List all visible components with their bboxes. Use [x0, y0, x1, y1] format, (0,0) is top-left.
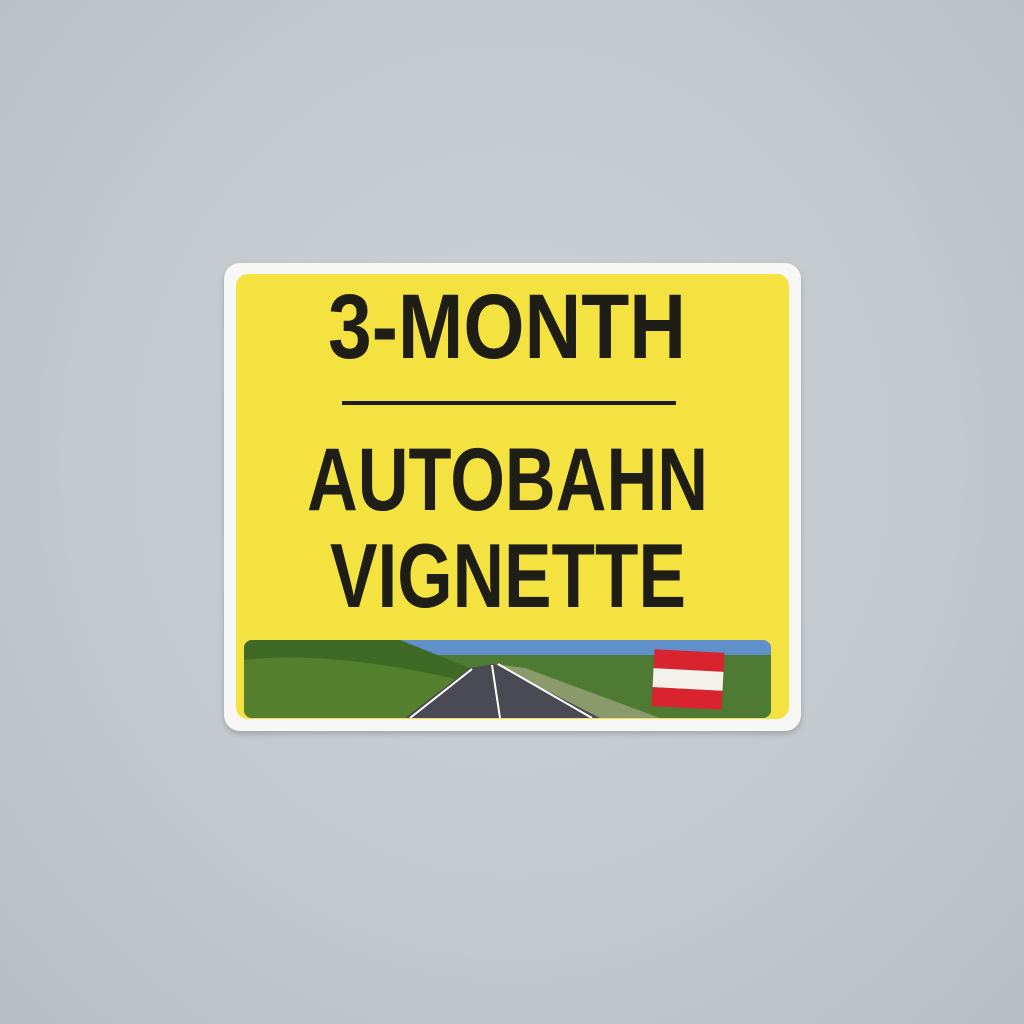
icon: Austrian flag: [652, 649, 724, 710]
divider line: [342, 401, 676, 405]
road photo strip: [244, 640, 771, 718]
heading: 3-MONTH: 3-MONTH: [328, 276, 686, 378]
heading: VIGNETTE: VIGNETTE: [330, 526, 686, 627]
title text: [244, 294, 771, 718]
yellow panel: [236, 274, 789, 719]
heading: AUTOBAHN: AUTOBAHN: [307, 429, 708, 529]
vignette sign card: [224, 263, 801, 731]
